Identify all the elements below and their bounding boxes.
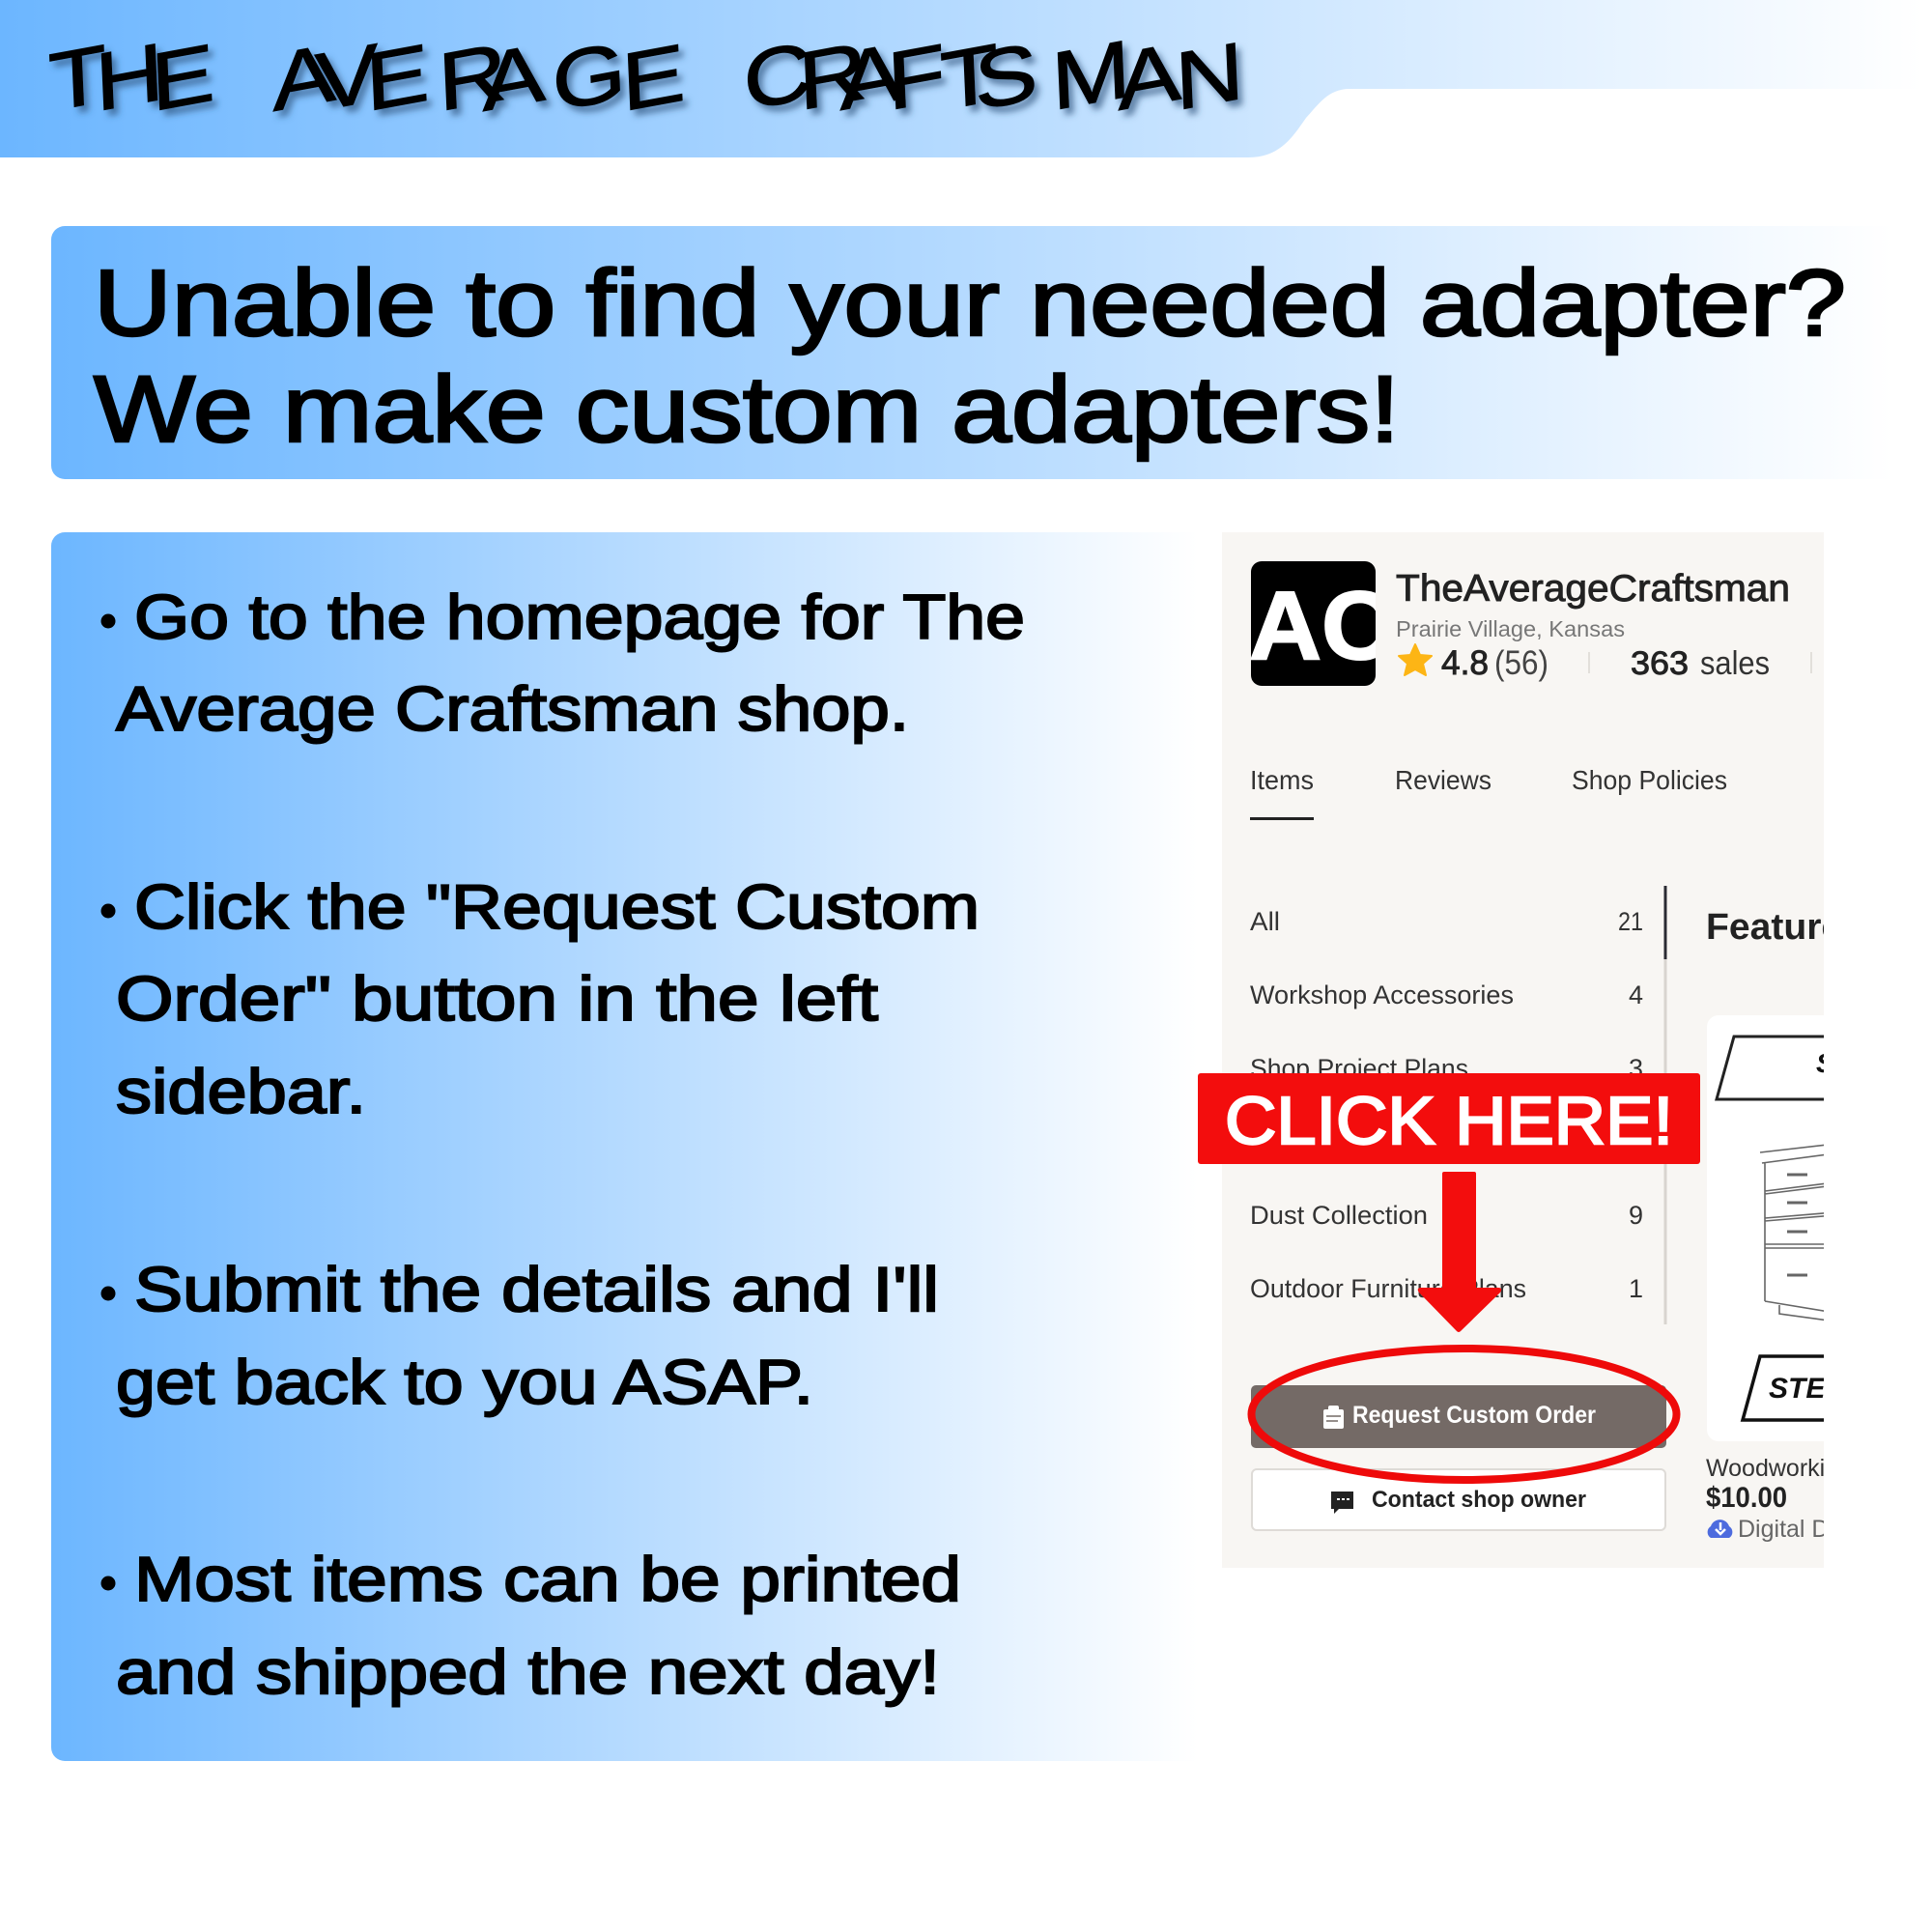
step 1 xyxy=(102,582,1025,744)
icon: chat bubble xyxy=(1331,1492,1353,1514)
brand title: CRAFTSMAN xyxy=(724,22,1264,128)
sidebar categories: Outdoor Furniture Plans xyxy=(1250,1274,1526,1303)
product card: S xyxy=(1816,1048,1834,1078)
product price: $10.00 xyxy=(1706,1482,1787,1514)
instructions panel xyxy=(51,532,1210,1761)
step 4: Most items can be printed xyxy=(134,1544,961,1614)
sidebar categories: 21 xyxy=(1618,907,1643,936)
top sign xyxy=(1717,1037,1835,1099)
shop name: TheAverageCraftsman xyxy=(1396,568,1790,610)
tabs: Items xyxy=(1250,765,1314,795)
brand title xyxy=(29,22,1264,128)
sidebar categories: 9 xyxy=(1629,1201,1643,1230)
featured heading: Featured xyxy=(1706,907,1865,948)
brand title: AVERAGE xyxy=(252,24,705,128)
sidebar categories: Workshop Accessories xyxy=(1250,980,1514,1009)
request custom order button: Request Custom Order xyxy=(1352,1402,1596,1429)
sidebar categories: Shop Project Plans xyxy=(1250,1054,1468,1083)
contact shop owner button: Contact shop owner xyxy=(1372,1487,1586,1513)
tabs xyxy=(1250,765,1727,820)
shop location: Prairie Village, Kansas xyxy=(1396,616,1625,641)
product card: STEP xyxy=(1769,1373,1845,1405)
sales count: sales xyxy=(1700,645,1770,682)
step 2: sidebar. xyxy=(116,1056,366,1126)
rating: (56) xyxy=(1494,644,1548,682)
sidebar categories: All xyxy=(1250,907,1280,936)
product card xyxy=(1707,1015,1824,1441)
step 3: Submit the details and I'll xyxy=(134,1254,939,1324)
headline panel xyxy=(51,226,1916,479)
icon: download cloud xyxy=(1708,1520,1732,1538)
highlight ellipse xyxy=(1252,1349,1677,1480)
sidebar categories xyxy=(1250,907,1643,1303)
tabs: Reviews xyxy=(1395,765,1492,795)
step 3: get back to you ASAP. xyxy=(116,1347,813,1417)
sidebar categories: 3 xyxy=(1629,1054,1643,1083)
step 4: and shipped the next day! xyxy=(116,1636,940,1707)
step 1: Go to the homepage for The xyxy=(134,582,1025,652)
rating xyxy=(1441,649,1547,682)
product title: Woodworking xyxy=(1706,1455,1852,1482)
headline text xyxy=(94,250,1846,462)
request custom order button xyxy=(1251,1385,1666,1448)
sidebar categories: 1 xyxy=(1629,1274,1643,1303)
icon: clipboard xyxy=(1323,1406,1344,1429)
sales count: 363 xyxy=(1631,645,1689,682)
shop logo: AC xyxy=(1249,572,1394,680)
step 4 xyxy=(102,1544,961,1707)
headline text: We make custom adapters! xyxy=(94,356,1400,462)
step 2: Order" button in the left xyxy=(116,963,878,1034)
arrow: pointing to button xyxy=(1418,1172,1501,1332)
sidebar categories: Dust Collection xyxy=(1250,1201,1428,1230)
step 2 xyxy=(102,871,980,1126)
shop screenshot panel xyxy=(1222,532,1824,1568)
brand title: THE xyxy=(29,25,234,128)
tabs: Shop Policies xyxy=(1572,765,1727,795)
sidebar categories: 4 xyxy=(1629,980,1643,1009)
step 1: Average Craftsman shop. xyxy=(116,673,909,744)
step 3 xyxy=(102,1254,939,1417)
dresser drawing xyxy=(1760,1144,1824,1321)
sales count xyxy=(1631,650,1769,675)
icon: star xyxy=(1399,644,1432,675)
sidebar scroll rail xyxy=(1663,886,1667,1324)
rating: 4.8 xyxy=(1441,644,1489,682)
header banner xyxy=(0,0,1922,157)
headline text: Unable to find your needed adapter? xyxy=(94,250,1846,355)
bottom sign xyxy=(1743,1356,1835,1420)
step 2: Click the "Request Custom xyxy=(134,871,980,942)
contact shop owner button xyxy=(1252,1469,1665,1530)
click here callout: CLICK HERE! xyxy=(1225,1083,1673,1158)
digital download label: Digital Download xyxy=(1738,1516,1919,1543)
